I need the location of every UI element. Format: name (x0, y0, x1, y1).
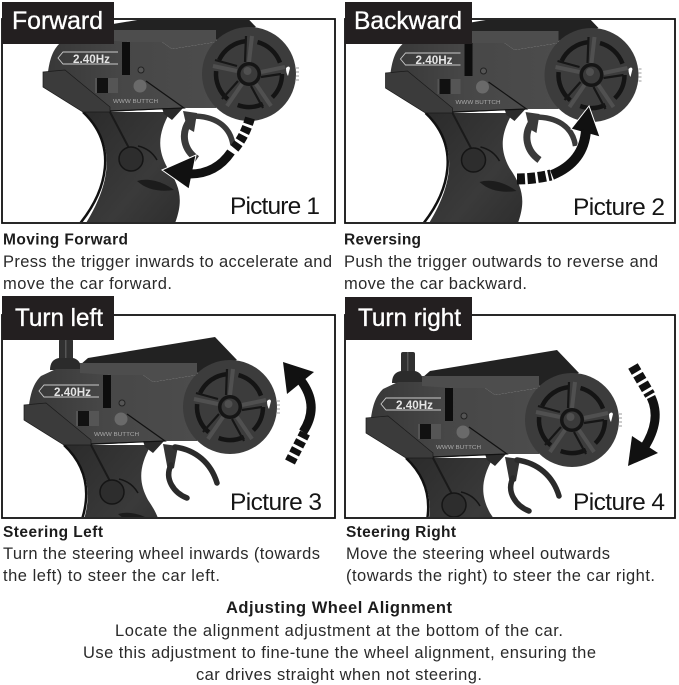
frame (345, 19, 675, 223)
text block: moving forward: Moving Forward (3, 232, 128, 248)
heading: Forward: Forward (12, 7, 103, 35)
label: Picture 3: Picture 3 (230, 489, 322, 516)
panel: turn right (344, 297, 676, 519)
heading: Turn left: Turn left (15, 304, 103, 332)
frame (345, 315, 675, 518)
arrow: steer right (628, 366, 658, 466)
panel: backward (345, 2, 675, 236)
text block: adjusting wheel alignment: Locate the alignment adjustment at the bottom of the car. (115, 622, 563, 640)
heading: Turn right: Turn right (358, 304, 461, 332)
text block: moving forward (3, 232, 332, 293)
heading: Turn right (345, 297, 472, 340)
transmitter illustration: forward (42, 20, 299, 222)
heading: Backward (345, 2, 472, 44)
text block: steering right (346, 524, 655, 585)
label: Picture 2: Picture 2 (573, 194, 665, 221)
text block: steering right: Steering Right (346, 524, 456, 541)
arrow: trigger inwards (162, 118, 250, 189)
text block: reversing (344, 232, 658, 293)
arrow: trigger outwards (517, 106, 600, 179)
transmitter illustration: turn right (366, 350, 622, 517)
text block: steering left: Turn the steering wheel inwards (towards (3, 545, 320, 563)
text block: steering left: Steering Left (3, 524, 103, 541)
label: Picture 1: Picture 1 (230, 193, 320, 220)
transmitter illustration: turn left (24, 337, 280, 517)
arrow: steer left (283, 362, 314, 462)
text block: steering left (3, 524, 320, 585)
text block: steering right: Move the steering wheel outwards (346, 545, 610, 563)
frame (2, 315, 335, 518)
label: Picture 4: Picture 4 (573, 489, 665, 516)
text block: moving forward: Press the trigger inwards to accelerate and (3, 253, 332, 271)
text block: steering left: the left) to steer the car left. (3, 567, 220, 585)
heading: Turn left (2, 296, 114, 340)
panel: forward (2, 2, 335, 235)
text block: adjusting wheel alignment: car drives straight when not steering. (196, 666, 482, 684)
transmitter illustration: backward (385, 20, 642, 222)
text block: moving forward: move the car forward. (3, 275, 172, 293)
text block: adjusting wheel alignment: Use this adjustment to fine-tune the wheel alignment, ensuring the (83, 644, 596, 662)
panel: turn left (1, 296, 336, 519)
text block: reversing: Reversing (344, 232, 421, 248)
text block: steering right: (towards the right) to steer the car right. (346, 567, 655, 585)
text block: reversing: move the car backward. (344, 275, 527, 293)
text block: adjusting wheel alignment (83, 599, 596, 684)
frame (2, 19, 335, 223)
heading: Forward (2, 2, 114, 44)
text block: reversing: Push the trigger outwards to reverse and (344, 253, 658, 271)
text block: adjusting wheel alignment: Adjusting Wheel Alignment (226, 599, 452, 617)
heading: Backward: Backward (354, 7, 462, 35)
